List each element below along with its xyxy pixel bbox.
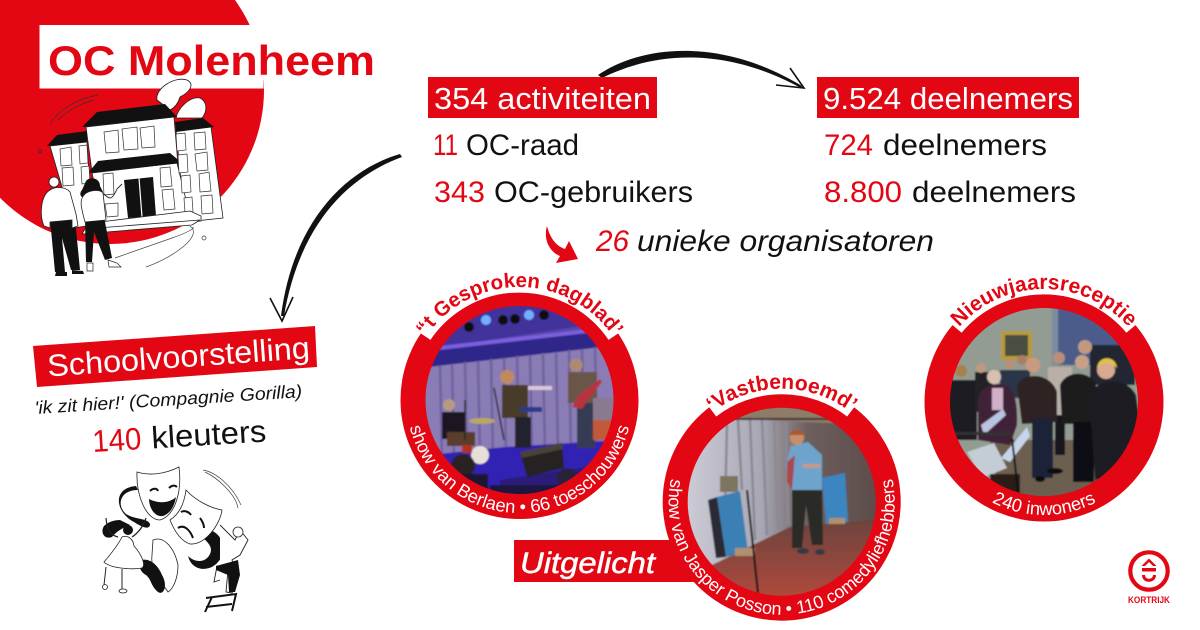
stat: 8.800 deelnemers bbox=[824, 176, 1076, 209]
heading: 't Gesproken dagblad: “t Gesproken dagblad’ bbox=[416, 272, 624, 331]
title: OC Molenheem bbox=[40, 25, 375, 88]
stat: 140 kleuters: 140 bbox=[91, 421, 142, 459]
stat: 26 unieke organisatoren: unieke organisatoren bbox=[637, 225, 934, 258]
text: ik zit hier: 'ik zit hier!' (Compagnie Gorilla) bbox=[34, 381, 303, 418]
panel: Nieuwjaarsreceptie bbox=[924, 278, 1164, 522]
illustration: theatre masks and performers bbox=[102, 467, 248, 612]
panel: Uitgelicht label: Uitgelicht bbox=[520, 547, 657, 580]
banner: Schoolvoorstelling: Schoolvoorstelling bbox=[46, 330, 311, 383]
arrow: activities to participants bbox=[598, 51, 804, 88]
panel: 't Gesproken dagblad bbox=[400, 272, 638, 519]
stat: 354 activiteiten: 354 activiteiten bbox=[434, 81, 651, 116]
title: OC Molenheem: OC Molenheem bbox=[48, 37, 375, 84]
heading: Vastbenoemd: ‘Vastbenoemd’ bbox=[706, 376, 858, 408]
stat: 26 unieke organisatoren: 26 bbox=[595, 225, 629, 258]
heading: Nieuwjaarsreceptie: Nieuwjaarsreceptie bbox=[950, 278, 1134, 326]
photo: crowd at reception bbox=[950, 308, 1138, 496]
stat: 9.524 deelnemers: 9.524 deelnemers bbox=[823, 81, 1073, 116]
stat: 724 deelnemers: 724 bbox=[824, 129, 873, 162]
caption: show van Berlaen: show van Berlaen • 66 toeschouwers bbox=[410, 426, 628, 513]
caption: show van Jasper Posson: show van Jasper Posson • 110 comedyliefhebbers bbox=[668, 479, 895, 615]
stat: 11 OC-raad: 11 bbox=[433, 129, 458, 162]
arrow: from building down to schoolvoorstelling bbox=[270, 154, 402, 321]
icon: red arrow bbox=[546, 226, 578, 263]
logo: Kortrijk: KORTRIJK bbox=[1128, 595, 1170, 605]
red background circle bbox=[0, 0, 264, 244]
photo: band on stage bbox=[426, 306, 614, 494]
stat: 343 OC-gebruikers: 343 bbox=[434, 176, 485, 209]
stat: 343 OC-gebruikers: OC-gebruikers bbox=[494, 176, 693, 209]
panel: Uitgelicht label bbox=[514, 540, 704, 582]
stat: 140 kleuters: kleuters bbox=[150, 414, 267, 455]
stat: 8.800 deelnemers: deelnemers bbox=[912, 176, 1076, 209]
panel: Vastbenoemd bbox=[662, 376, 901, 621]
photo: comedian on stage bbox=[688, 408, 876, 596]
caption: 240 inwoners: 240 inwoners bbox=[992, 492, 1095, 516]
stat: 140 kleuters bbox=[91, 414, 267, 459]
stat: 8.800 deelnemers: 8.800 bbox=[824, 176, 902, 209]
stat: 724 deelnemers: deelnemers bbox=[883, 129, 1047, 162]
illustration: building with two people bbox=[38, 79, 223, 276]
logo: Kortrijk bbox=[1128, 552, 1170, 605]
stat: 11 OC-raad: OC-raad bbox=[466, 129, 579, 162]
